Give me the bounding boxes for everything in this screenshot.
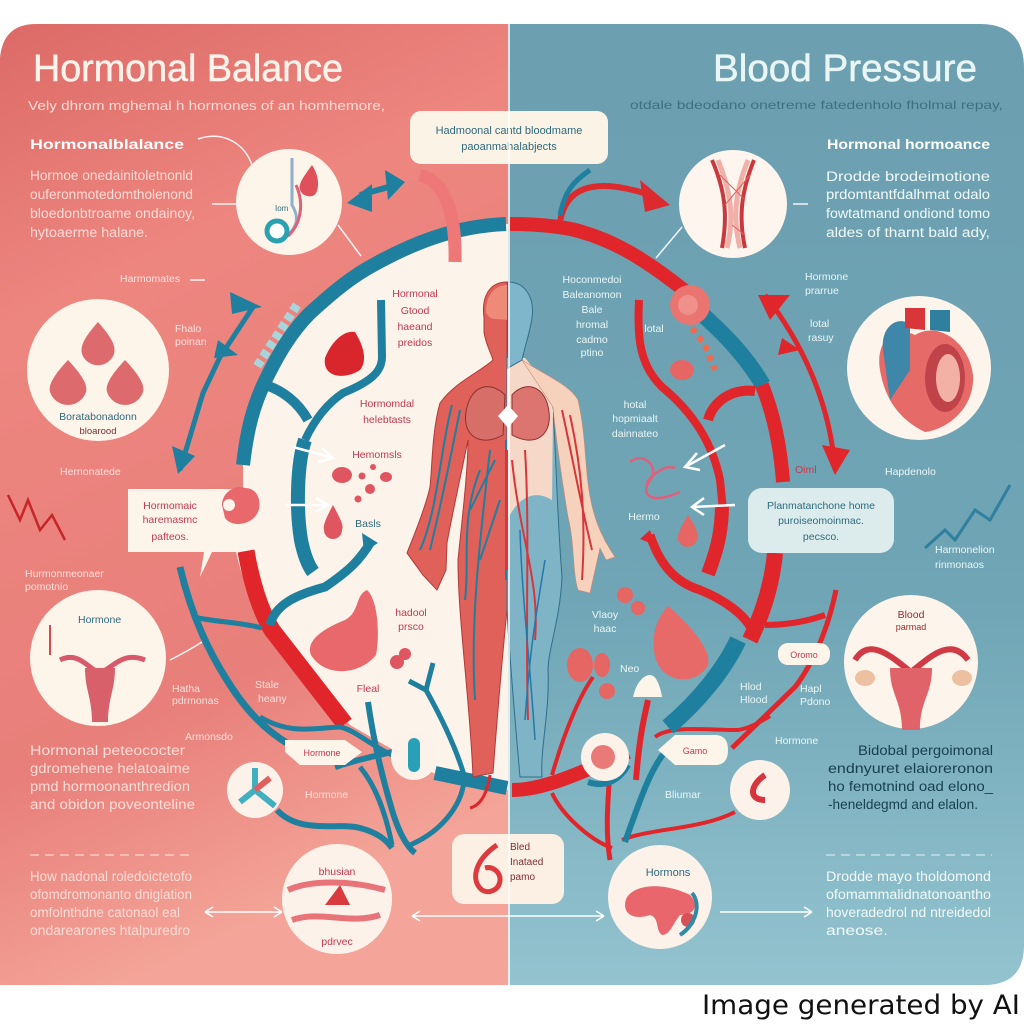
connector lines bbox=[170, 136, 808, 660]
small labels bbox=[25, 271, 995, 801]
brain bbox=[486, 285, 507, 320]
pill labels: Gamo bbox=[683, 746, 707, 756]
icon: blood drop 6 callout bbox=[452, 834, 564, 904]
small labels: dainnateo bbox=[612, 428, 658, 440]
text block: left intro bbox=[30, 136, 195, 240]
small labels: Baleanomon bbox=[563, 289, 622, 301]
right head bbox=[508, 282, 532, 368]
pulse line right bbox=[925, 485, 1010, 548]
pills bbox=[285, 643, 830, 765]
small labels: Stale bbox=[255, 679, 279, 691]
small labels: Hapdenolo bbox=[885, 466, 936, 478]
text block: right intro bbox=[826, 136, 990, 240]
main vessel ring: red right arc top bbox=[510, 224, 685, 291]
dots left bbox=[324, 464, 411, 669]
small labels: hotal bbox=[624, 399, 646, 411]
small labels: Hurmonmeonaer bbox=[25, 568, 104, 580]
divider right bbox=[826, 854, 992, 856]
small labels: Harmonelion bbox=[935, 544, 995, 556]
lungs bbox=[465, 387, 505, 440]
callout: top center: Hadmoonal cantd bloodmame bbox=[436, 125, 582, 137]
small labels: Hemomsls bbox=[352, 449, 402, 461]
arrow top right bbox=[560, 170, 670, 222]
text block: lower left: pmd hormoonanthredion bbox=[30, 779, 190, 794]
icon circle: three drops: Boratabonadonn bbox=[59, 411, 137, 423]
small labels: Hormone bbox=[775, 735, 818, 747]
small labels: Hormone bbox=[805, 271, 848, 283]
small labels: lotal bbox=[810, 318, 829, 330]
small labels: Hoconmedoi bbox=[563, 274, 621, 286]
small labels: Hormonal bbox=[392, 288, 438, 300]
small labels: Hatha bbox=[172, 683, 200, 695]
small labels: ptino bbox=[581, 347, 604, 359]
right arm bbox=[522, 360, 615, 593]
icon circle: blood drop tube bbox=[236, 149, 342, 255]
small labels: rinmonaos bbox=[935, 559, 984, 571]
text block: lower left bbox=[30, 743, 195, 812]
small labels: helebtasts bbox=[363, 414, 411, 426]
main vessel ring: blue left arc bbox=[243, 224, 506, 465]
arrow top left bbox=[347, 170, 455, 262]
inner blue vessel bbox=[265, 300, 382, 572]
icon circle: artery bbox=[679, 150, 787, 258]
small labels: lotal bbox=[644, 323, 664, 335]
organ: red blob right bbox=[670, 285, 710, 325]
small labels: Hlod bbox=[740, 681, 762, 693]
small labels: Vlaoy bbox=[592, 609, 619, 621]
organ: stomach left bbox=[310, 590, 378, 671]
icon: blood drop 6 callout: Bled bbox=[510, 842, 530, 853]
small labels: prsco bbox=[398, 621, 424, 633]
text block: bottom right: aneose. bbox=[826, 923, 888, 938]
small labels: Bale bbox=[581, 304, 603, 316]
text block: lower left: and obidon poveonteline bbox=[30, 797, 195, 812]
right torso cream bbox=[507, 358, 553, 520]
center divider bbox=[508, 24, 510, 985]
right leg and torso bbox=[507, 355, 562, 777]
text block: right intro: aldes of tharnt bald ady, bbox=[826, 225, 990, 240]
blue right arc bbox=[703, 315, 763, 385]
small labels: rasuy bbox=[808, 332, 834, 344]
icon circle: uterus right bbox=[844, 595, 978, 730]
callout: top center bbox=[410, 111, 608, 164]
small labels: hromal bbox=[576, 319, 608, 331]
arrow heads on vessels bbox=[362, 533, 378, 552]
text block: lower left: Hormonal peteococter bbox=[30, 743, 186, 758]
blue lower right vessels bbox=[588, 640, 738, 842]
zigzag arrow left bbox=[172, 292, 262, 474]
organ: drop right bbox=[653, 606, 708, 679]
callout: right blood: puroiseomoinmac. bbox=[778, 515, 864, 527]
zigzag arrow right bbox=[758, 295, 850, 475]
small labels: cadmo bbox=[576, 334, 608, 346]
callout: left hormone: pafteos. bbox=[151, 531, 189, 543]
dots right bbox=[567, 328, 715, 699]
text block: bottom left: ondarearones htalpuredro bbox=[30, 923, 190, 938]
icon circle: heart bbox=[847, 296, 991, 440]
panel: hormonal balance bbox=[0, 24, 508, 985]
icon circle: uterus left bbox=[30, 590, 166, 726]
left half bbox=[407, 282, 507, 777]
text block: bottom right: ofomammalidnatonoantho bbox=[826, 887, 991, 902]
small labels: Hormomdal bbox=[360, 398, 414, 410]
pill labels: Oromo bbox=[790, 650, 818, 660]
human body figure bbox=[407, 282, 615, 777]
organ: red clot bbox=[325, 332, 364, 376]
divider left bbox=[30, 854, 195, 856]
icon: hook bbox=[730, 760, 790, 820]
subtitle right: otdale bdeodano onetreme fatedenholo fholmal repay, bbox=[630, 98, 1003, 112]
small labels: pomotnio bbox=[25, 581, 68, 593]
small labels: hadool bbox=[395, 607, 427, 619]
small labels: poinan bbox=[175, 336, 207, 348]
icon circle: three drops: bloarood bbox=[80, 426, 116, 437]
title: blood pressure: Blood Pressure bbox=[713, 48, 977, 90]
text block: bottom right: hoveradedrol nd ntreidedol bbox=[826, 905, 991, 920]
callout: right blood bbox=[748, 488, 894, 553]
small labels: Hormone bbox=[305, 789, 348, 801]
icon circle: uterus right: Blood bbox=[898, 609, 925, 621]
small labels: Fleal bbox=[357, 683, 379, 695]
caption: Image generated by AI bbox=[702, 990, 1020, 1021]
text block: bottom right bbox=[826, 869, 991, 938]
callout: right blood: pecsco. bbox=[803, 531, 839, 543]
small labels: heany bbox=[258, 693, 287, 705]
double arrows bottom bbox=[205, 907, 812, 921]
pulse line left bbox=[8, 495, 65, 540]
lower center foot wrap left bbox=[470, 775, 490, 808]
icon circle: bottom left vessel bbox=[282, 844, 392, 954]
icon circle: bottom left vessel: bhusian bbox=[319, 866, 356, 878]
text block: right intro: prdomtantfdalhmat odalo bbox=[826, 187, 990, 202]
small labels: Armonsdo bbox=[185, 731, 233, 743]
text block: right intro: fowtatmand ondiond tomo bbox=[826, 206, 990, 221]
icon circle: blood drop tube: Iom bbox=[275, 204, 289, 213]
small labels: Hapl bbox=[800, 683, 822, 695]
small labels: Gtood bbox=[401, 305, 429, 317]
small labels: Hlood bbox=[740, 694, 768, 706]
text block: bottom left: ofomdromonanto dniglation bbox=[30, 887, 192, 902]
small labels: Neo bbox=[620, 663, 639, 675]
icon: swirl bbox=[630, 458, 680, 498]
red left arc bbox=[246, 551, 345, 724]
text block: lower right: -heneldegmd and elalon. bbox=[828, 797, 978, 812]
text block: left intro: bloedonbtroame ondainoy, bbox=[30, 206, 195, 221]
icon circle: uterus left: Hormone bbox=[78, 614, 121, 626]
red inner branches right bbox=[512, 300, 836, 860]
text block: bottom left: How nadonal roledoictetofo bbox=[30, 869, 192, 884]
text block: lower right: ho femotnind oad elono_ bbox=[828, 779, 994, 794]
small labels: Harmomates bbox=[120, 273, 180, 285]
text block: bottom left: omfolnthdne catonaol eal bbox=[30, 905, 180, 920]
text block: lower right bbox=[828, 743, 994, 812]
subtitle left: Vely dhrom mghemal h hormones of an homhemore, bbox=[28, 98, 385, 113]
small labels: haac bbox=[594, 623, 616, 635]
text block: left intro: Hormoe onedainitoletnonld bbox=[30, 168, 193, 183]
icon circle: bottom right brain bbox=[608, 845, 712, 949]
small labels: Bliumar bbox=[665, 789, 701, 801]
icon: crossing vessels bbox=[227, 762, 283, 818]
text block: right intro: Hormonal hormoance bbox=[827, 136, 990, 152]
callout: left hormone: haremasmc bbox=[143, 514, 197, 526]
panel: blood pressure bbox=[508, 24, 1024, 985]
small labels: Basls bbox=[355, 518, 381, 530]
text block: lower right: Bidobal pergoimonal bbox=[858, 743, 993, 758]
text block: left intro: hytoaerme halane. bbox=[30, 225, 148, 240]
small labels: prarrue bbox=[805, 285, 839, 297]
icon: ring marker lower right bbox=[581, 733, 629, 781]
small labels: Fhalo bbox=[175, 323, 201, 335]
stripe beside ring bbox=[256, 305, 297, 368]
icon: blood drop 6 callout: Inataed bbox=[510, 857, 543, 868]
text block: lower right: endnyuret elaioreronon bbox=[828, 761, 993, 776]
icon circle: bottom left vessel: pdrvec bbox=[321, 936, 353, 948]
white arrows bbox=[285, 445, 735, 515]
callout: top center: paoanmahalabjects bbox=[461, 141, 557, 153]
arrow head red inner bbox=[640, 530, 655, 545]
small labels: preidos bbox=[398, 337, 432, 349]
callout: right blood: Planmatanchone home bbox=[767, 500, 875, 512]
small labels: haeand bbox=[397, 321, 433, 333]
pill labels: Hormone bbox=[303, 748, 341, 758]
icon: small circle lower left bbox=[391, 734, 437, 780]
small labels: hopmiaalt bbox=[612, 413, 658, 425]
small labels: Hermo bbox=[628, 511, 660, 523]
callout: left hormone: Hormomaic bbox=[143, 500, 197, 512]
small labels: pdrmonas bbox=[172, 695, 219, 707]
text block: bottom right: Drodde mayo tholdomond bbox=[826, 869, 991, 884]
red right arc side bbox=[708, 385, 783, 640]
blue branches lower left bbox=[180, 540, 507, 853]
icon circle: three drops bbox=[27, 299, 169, 441]
small labels: Oiml bbox=[795, 464, 817, 476]
vessels bbox=[420, 405, 506, 700]
title: hormonal balance: Hormonal Balance bbox=[33, 48, 343, 90]
small labels: Hernonatede bbox=[60, 466, 121, 478]
cream half circle bbox=[128, 224, 508, 790]
text block: right intro: Drodde brodeimotione bbox=[826, 169, 990, 184]
small labels: Pdono bbox=[800, 696, 831, 708]
icon circle: bottom right brain: Hormons bbox=[646, 867, 691, 879]
callout: left hormone bbox=[128, 487, 259, 577]
pill labels bbox=[303, 650, 818, 758]
text block: left intro: Hormonalblalance bbox=[30, 136, 184, 152]
heart center mark bbox=[498, 405, 518, 428]
text block: left intro: ouferonmotedomtholenond bbox=[30, 187, 193, 202]
text block: bottom left bbox=[30, 869, 192, 938]
icon: blood drop 6 callout: pamo bbox=[510, 872, 535, 883]
text block: lower left: gdromehene helatoaime bbox=[30, 761, 190, 776]
icon circle: uterus right: parmad bbox=[896, 622, 926, 632]
